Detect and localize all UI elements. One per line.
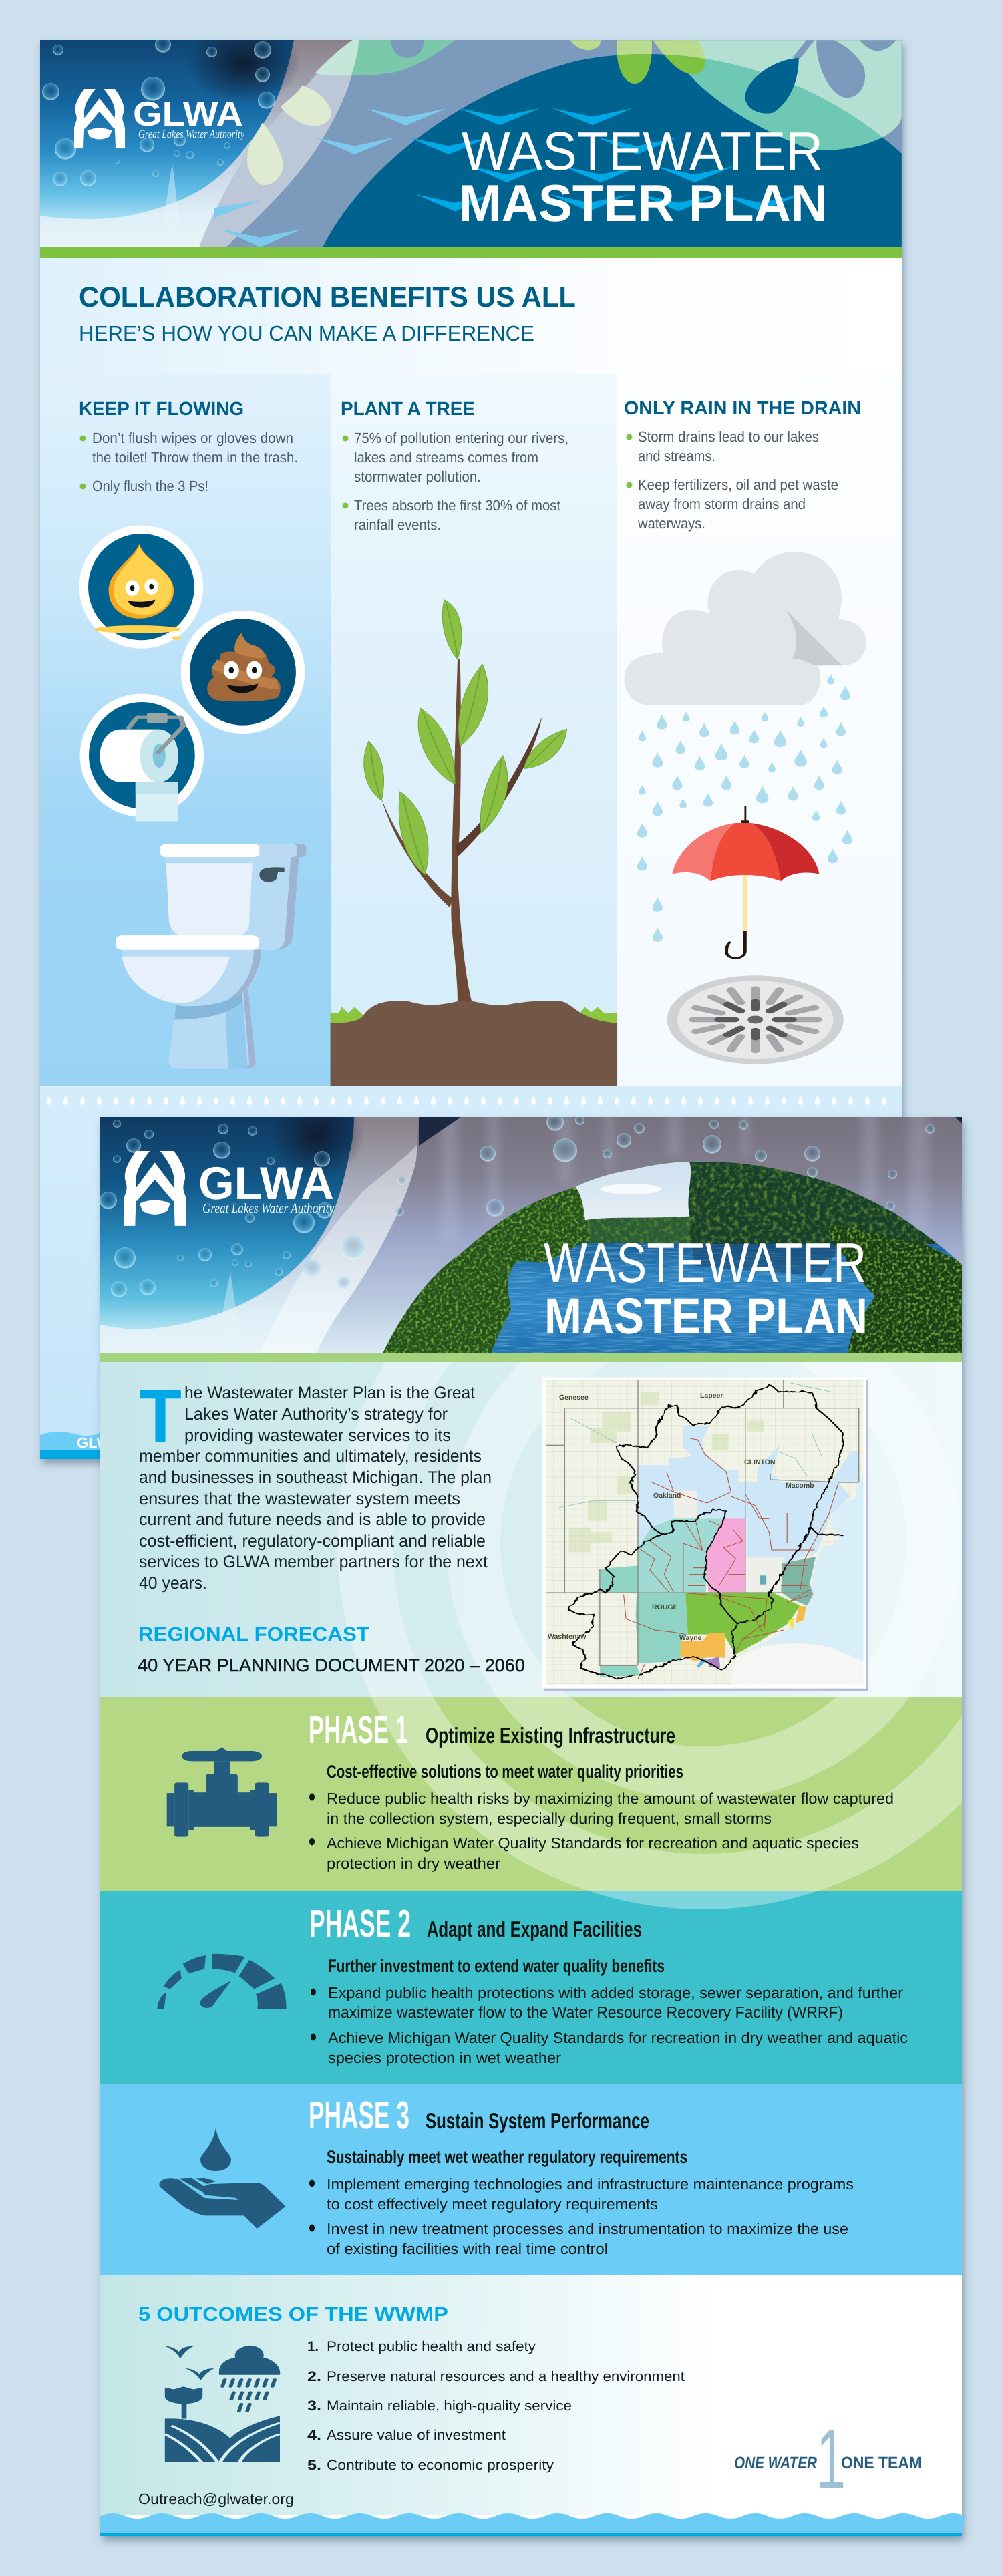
map: service area: Macomb bbox=[786, 1482, 814, 1490]
heading: regional forecast: REGIONAL FORECAST bbox=[138, 1624, 369, 1645]
phase 2: adapt and expand facilities: Achieve Michigan Water Quality Standards for recreation in dry weather and aquatic bbox=[328, 2029, 908, 2046]
phase 1: optimize existing infrastructure: Achieve Michigan Water Quality Standards for recreation and aquatic species bbox=[327, 1834, 859, 1852]
column: only rain in the drain text: waterways. bbox=[637, 515, 705, 532]
column: only rain in the drain text: Keep fertilizers, oil and pet waste bbox=[638, 476, 838, 493]
icon: oil drop bbox=[79, 525, 203, 649]
column: plant a tree text: PLANT A TREE bbox=[341, 398, 475, 419]
column: keep it flowing text: Don’t flush wipes or gloves down bbox=[92, 430, 293, 446]
logo: GLWA: Great Lakes Water Authority bbox=[138, 128, 244, 140]
list: five outcomes: Assure value of investment bbox=[327, 2428, 506, 2443]
phase 2: adapt and expand facilities: species protection in wet weather bbox=[328, 2049, 561, 2066]
illustration: raindrops bbox=[637, 674, 852, 942]
drop cap and intro paragraph bbox=[139, 1374, 492, 1593]
footer band of back page: GLW bbox=[77, 1434, 110, 1451]
column: only rain in the drain text: and streams. bbox=[638, 448, 715, 464]
phase 3: sustain system performance: Sustain System Performance bbox=[426, 2108, 649, 2133]
drop cap and intro paragraph: services to GLWA member partners for the next bbox=[139, 1553, 488, 1571]
phase 3: sustain system performance: Invest in new treatment processes and instrumentation to maximize the use bbox=[327, 2220, 848, 2237]
map: service area: Lapeer bbox=[700, 1392, 723, 1400]
illustration: tree and soil bbox=[331, 600, 617, 1086]
phase 1: optimize existing infrastructure: in the collection system, especially during frequent, small storms bbox=[327, 1810, 772, 1827]
phase 2: adapt and expand facilities: Adapt and Expand Facilities bbox=[427, 1917, 642, 1941]
phase 1: optimize existing infrastructure bbox=[167, 1708, 894, 1872]
drop cap and intro paragraph: providing wastewater services to its bbox=[184, 1426, 451, 1445]
title: wastewater master plan: WASTEWATER bbox=[462, 122, 823, 182]
phase 1: optimize existing infrastructure: Reduce public health risks by maximizing the amount of wastewater flow captured bbox=[327, 1790, 894, 1807]
drop cap and intro paragraph: T bbox=[139, 1374, 182, 1459]
panel: collaboration flyer (back page) bbox=[40, 22, 902, 1459]
map: service area: CLINTON bbox=[744, 1458, 775, 1466]
column: only rain in the drain text: Storm drains lead to our lakes bbox=[638, 428, 819, 445]
title: wastewater master plan: MASTER PLAN bbox=[459, 174, 828, 232]
subheading: HERE’S HOW YOU CAN MAKE A DIFFERENCE bbox=[79, 321, 534, 345]
logo: GLWA bbox=[74, 89, 244, 148]
photo: lake scene bbox=[381, 1159, 962, 1353]
illustration: storm drain bbox=[667, 975, 844, 1064]
logo: GLWA: Great Lakes Water Authority bbox=[202, 1201, 334, 1216]
column: plant a tree text: Trees absorb the first 30% of most bbox=[354, 497, 560, 514]
phase 2: adapt and expand facilities: Expand public health protections with added storage, sewer separation, and further bbox=[328, 1984, 903, 2001]
green divider bar bbox=[40, 247, 902, 258]
map: service area: Washtenaw bbox=[548, 1633, 587, 1641]
column: plant a tree text: rainfall events. bbox=[354, 516, 441, 533]
column: only rain in the drain text: away from storm drains and bbox=[638, 496, 806, 512]
icon: toilet bbox=[116, 844, 306, 1069]
phase 2: adapt and expand facilities: maximize wastewater flow to the Water Resource Recovery Facility (WRRF) bbox=[328, 2003, 843, 2021]
phase 3: sustain system performance: PHASE 3 bbox=[309, 2094, 409, 2137]
icon: poop bbox=[181, 611, 305, 734]
illustration: umbrella bbox=[672, 806, 819, 958]
drop cap and intro paragraph: member communities and ultimately, residents bbox=[139, 1447, 482, 1466]
phase 2: adapt and expand facilities bbox=[157, 1902, 908, 2066]
drop cap and intro paragraph: cost-efficient, regulatory-compliant and reliable bbox=[139, 1532, 486, 1551]
drop cap and intro paragraph: he Wastewater Master Plan is the Great bbox=[184, 1384, 475, 1402]
icon: valve bbox=[167, 1747, 277, 1837]
logo: one water one team: ONE WATER bbox=[734, 2454, 817, 2472]
green divider bar bbox=[100, 1353, 962, 1362]
decorative concentric rings bbox=[337, 1362, 962, 1909]
title: wastewater master plan bbox=[459, 122, 828, 232]
column: keep it flowing text: the toilet! Throw them in the trash. bbox=[92, 449, 298, 466]
list: five outcomes: 5. bbox=[307, 2458, 321, 2473]
phase 3: sustain system performance: Sustainably meet wet weather regulatory requirements bbox=[327, 2147, 687, 2167]
logo: GLWA bbox=[124, 1151, 334, 1226]
phase 3: sustain system performance: to cost effectively meet regulatory requirements bbox=[327, 2195, 658, 2213]
column: plant a tree text: lakes and streams comes from bbox=[354, 449, 538, 466]
drop cap and intro paragraph: ensures that the wastewater system meets bbox=[139, 1490, 460, 1508]
logo: GLWA: GLWA bbox=[133, 95, 243, 134]
logo: one water one team: ONE TEAM bbox=[841, 2454, 922, 2472]
phase 2: adapt and expand facilities: Further investment to extend water quality benefits bbox=[328, 1956, 665, 1976]
header: rain and leaf artwork bbox=[40, 22, 902, 247]
list: five outcomes bbox=[307, 2339, 685, 2473]
column: only rain in the drain text: ONLY RAIN IN THE DRAIN bbox=[624, 397, 861, 418]
column: keep it flowing text: KEEP IT FLOWING bbox=[79, 398, 244, 419]
title: wastewater master plan: WASTEWATER bbox=[544, 1231, 866, 1294]
column: plant a tree text: stormwater pollution. bbox=[354, 468, 481, 485]
phase 3: sustain system performance bbox=[159, 2094, 854, 2257]
column: plant a tree text bbox=[341, 398, 568, 533]
list: five outcomes: Contribute to economic prosperity bbox=[327, 2458, 554, 2473]
drop cap and intro paragraph: Lakes Water Authority’s strategy for bbox=[184, 1405, 448, 1424]
list: five outcomes: Preserve natural resources and a healthy environment bbox=[327, 2369, 685, 2384]
icon: hand and water drop bbox=[159, 2128, 286, 2229]
section backgrounds bbox=[100, 1362, 962, 2515]
phase 1: optimize existing infrastructure: protection in dry weather bbox=[327, 1855, 500, 1872]
list: five outcomes: 3. bbox=[307, 2398, 321, 2414]
title: wastewater master plan bbox=[544, 1231, 868, 1345]
map: service area: Wayne bbox=[679, 1634, 702, 1642]
column: keep it flowing text bbox=[79, 398, 298, 494]
column: plant a tree text: 75% of pollution entering our rivers, bbox=[354, 430, 568, 446]
phase 3: sustain system performance: of existing facilities with real time control bbox=[327, 2240, 608, 2257]
phase 1: optimize existing infrastructure: PHASE 1 bbox=[309, 1708, 408, 1752]
list: five outcomes: Protect public health and safety bbox=[327, 2339, 536, 2354]
heading: 5 outcomes of the WWMP: 5 OUTCOMES OF THE WWMP bbox=[138, 2304, 448, 2325]
column: keep it flowing text: Only flush the 3 Ps! bbox=[92, 478, 208, 494]
logo: one water one team: 1 bbox=[816, 2412, 846, 2507]
logo: one water one team bbox=[734, 2412, 922, 2507]
icon: toilet paper bbox=[80, 694, 204, 821]
phase 1: optimize existing infrastructure: Cost-effective solutions to meet water quality priorities bbox=[327, 1762, 683, 1782]
drop cap and intro paragraph: current and future needs and is able to provide bbox=[139, 1510, 486, 1529]
phase 3: sustain system performance: Implement emerging technologies and infrastructure maintenance programs bbox=[327, 2175, 854, 2193]
map: service area: ROUGE bbox=[652, 1603, 678, 1611]
map: service area: Oakland bbox=[653, 1492, 681, 1500]
title: wastewater master plan: MASTER PLAN bbox=[544, 1288, 868, 1345]
drop cap and intro paragraph: 40 years. bbox=[139, 1574, 207, 1593]
subheading: planning document: 40 YEAR PLANNING DOCUMENT 2020 – 2060 bbox=[138, 1655, 525, 1675]
list: five outcomes: Maintain reliable, high-quality service bbox=[327, 2398, 572, 2414]
phase 2: adapt and expand facilities: PHASE 2 bbox=[309, 1902, 411, 1945]
header: rain photo and lake bbox=[100, 1092, 962, 1353]
list: five outcomes: 4. bbox=[307, 2428, 321, 2443]
contact email: Outreach@glwater.org bbox=[138, 2490, 294, 2507]
icon: birds rain tulip and hills bbox=[165, 2346, 280, 2462]
logo: GLWA: GLWA bbox=[198, 1158, 334, 1209]
body background bbox=[40, 258, 902, 1086]
footer wave bbox=[100, 2513, 965, 2536]
heading: collaboration benefits us all: COLLABORATION BENEFITS US ALL bbox=[79, 281, 576, 313]
footer band of back page bbox=[40, 1086, 902, 1459]
illustration: rain cloud bbox=[624, 552, 866, 705]
phase 1: optimize existing infrastructure: Optimize Existing Infrastructure bbox=[426, 1723, 675, 1748]
icon: gauge bbox=[157, 1954, 287, 2009]
drop cap and intro paragraph: and businesses in southeast Michigan. The plan bbox=[139, 1468, 492, 1487]
list: five outcomes: 1. bbox=[307, 2339, 319, 2354]
panel: master plan flyer (front page) bbox=[100, 1092, 1002, 2536]
map: service area: Genesee bbox=[559, 1394, 589, 1402]
column: only rain in the drain text bbox=[624, 397, 861, 532]
map: service area bbox=[542, 1378, 868, 1691]
list: five outcomes: 2. bbox=[307, 2369, 321, 2384]
